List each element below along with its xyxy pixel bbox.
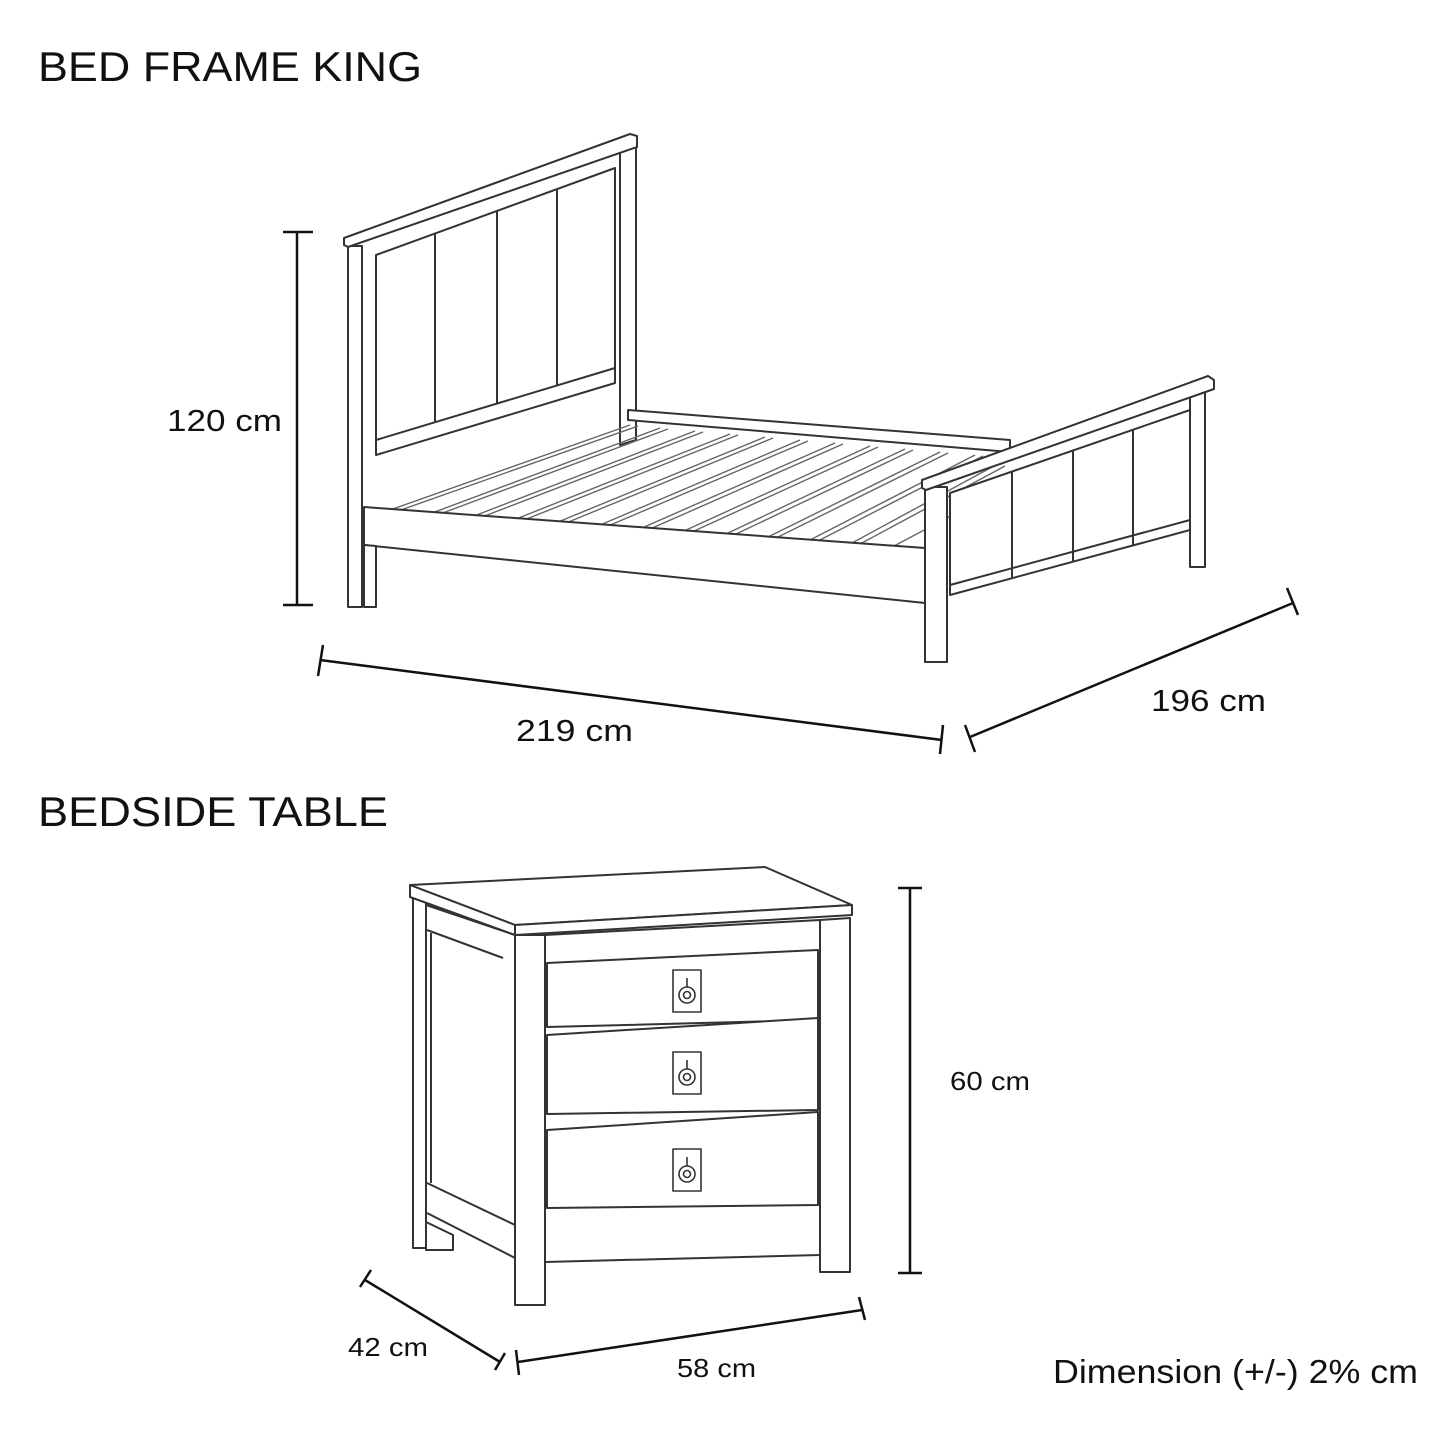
- dimension: height 120 cm: [283, 232, 313, 605]
- dimension: length 219 cm: [318, 645, 943, 754]
- drawers: [547, 950, 818, 1027]
- title: bedside table: BEDSIDE TABLE: [38, 788, 388, 835]
- label: 42 cm: 42 cm: [348, 1332, 428, 1362]
- label: 120 cm: 120 cm: [167, 403, 282, 438]
- dimension: width 58 cm: [516, 1297, 865, 1375]
- title: bed frame king: BED FRAME KING: [38, 43, 422, 90]
- footer note: Dimension (+/-) 2% cm: [1053, 1353, 1418, 1390]
- footboard: [922, 376, 1214, 662]
- label: 219 cm: 219 cm: [516, 713, 633, 748]
- label: 196 cm: 196 cm: [1151, 683, 1266, 718]
- dimension: width 196 cm: [965, 588, 1298, 752]
- right back post: [820, 918, 850, 1272]
- front-left post: [515, 935, 545, 1305]
- label: 58 cm: 58 cm: [677, 1353, 756, 1383]
- back rail: [628, 410, 1010, 452]
- top: [410, 867, 852, 925]
- headboard: [344, 134, 637, 607]
- dimension: depth 42 cm: [360, 1270, 505, 1370]
- drawer front area: [545, 920, 820, 1262]
- front side rail: [364, 507, 925, 603]
- label: 60 cm: 60 cm: [950, 1066, 1030, 1096]
- side panel: [413, 898, 426, 1248]
- drawing: bedside table: [410, 867, 852, 1305]
- dimension: height 60 cm: [898, 888, 922, 1273]
- slats: [390, 425, 1005, 546]
- handles: [673, 970, 701, 1191]
- drawing: bed frame: [344, 134, 1214, 662]
